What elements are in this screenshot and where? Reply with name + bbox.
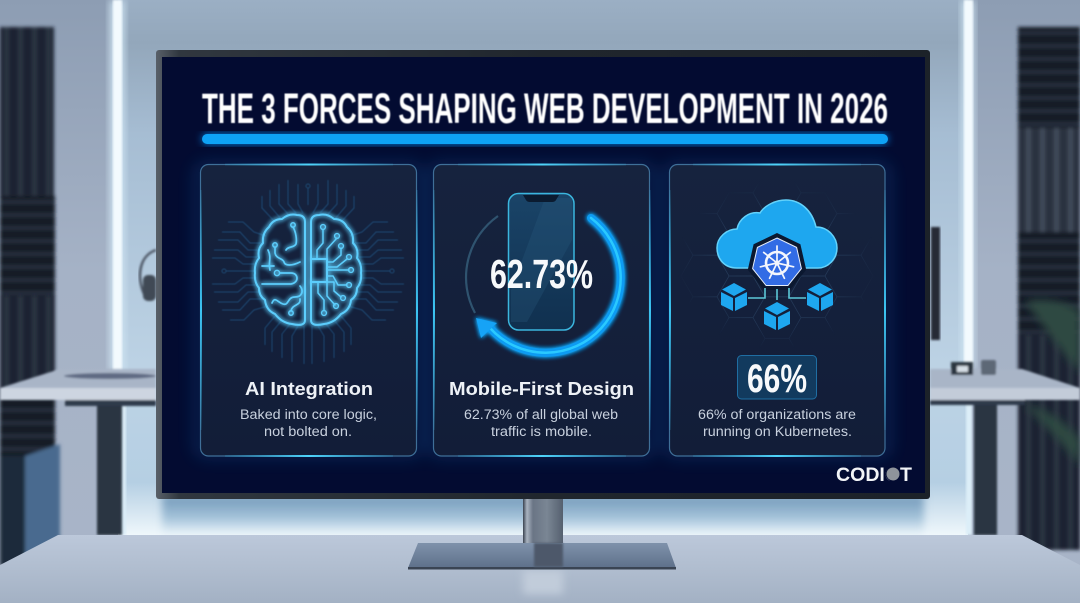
card background glow <box>198 166 887 454</box>
right room elements <box>1018 27 1080 550</box>
description: Kubernetes: 66% of organizations are <box>698 407 856 422</box>
description: AI Integration: Baked into core logic, <box>240 407 377 422</box>
title underline bar <box>202 134 888 144</box>
dark object behind monitor <box>931 227 940 340</box>
icon: cube bottom <box>764 302 790 330</box>
monitor <box>156 50 930 499</box>
table surface <box>0 535 1080 603</box>
icon: circuit brain <box>255 214 361 325</box>
LED light strips <box>110 0 974 535</box>
description: Mobile-First Design <box>464 407 618 439</box>
description: Mobile-First Design: traffic is mobile. <box>491 424 592 439</box>
panel: Kubernetes <box>669 164 886 457</box>
left acoustic panel <box>0 27 60 566</box>
right desk <box>930 360 1080 535</box>
icon: cube right <box>807 283 833 311</box>
panel: AI Integration <box>200 164 418 457</box>
left desk <box>0 369 156 535</box>
headphones <box>140 250 156 301</box>
icon: smartphone <box>508 194 574 330</box>
icon: connector lines <box>748 288 806 300</box>
stat badge: 66%: 66% <box>747 357 807 401</box>
icon: cloud with Kubernetes wheel <box>717 200 837 290</box>
circuit traces <box>212 180 404 364</box>
icon: cube left <box>721 283 747 311</box>
description: AI Integration <box>240 407 377 439</box>
description: Kubernetes <box>698 407 856 439</box>
heading: AI Integration: AI Integration <box>245 378 373 399</box>
panel: Mobile-First Design <box>433 164 651 457</box>
stat: 62.73%: 62.73% <box>490 251 593 297</box>
heading: Mobile-First Design: Mobile-First Design <box>449 378 634 399</box>
screen <box>162 57 925 493</box>
description: Mobile-First Design: 62.73% of all global web <box>464 407 618 422</box>
ring: progress arrow <box>476 218 621 353</box>
description: Kubernetes: running on Kubernetes. <box>703 424 852 439</box>
monitor stand <box>408 499 676 594</box>
description: AI Integration: not bolted on. <box>264 424 352 439</box>
ring: thin track <box>466 216 498 313</box>
logo: CODIOT: CODIOT <box>836 465 912 486</box>
